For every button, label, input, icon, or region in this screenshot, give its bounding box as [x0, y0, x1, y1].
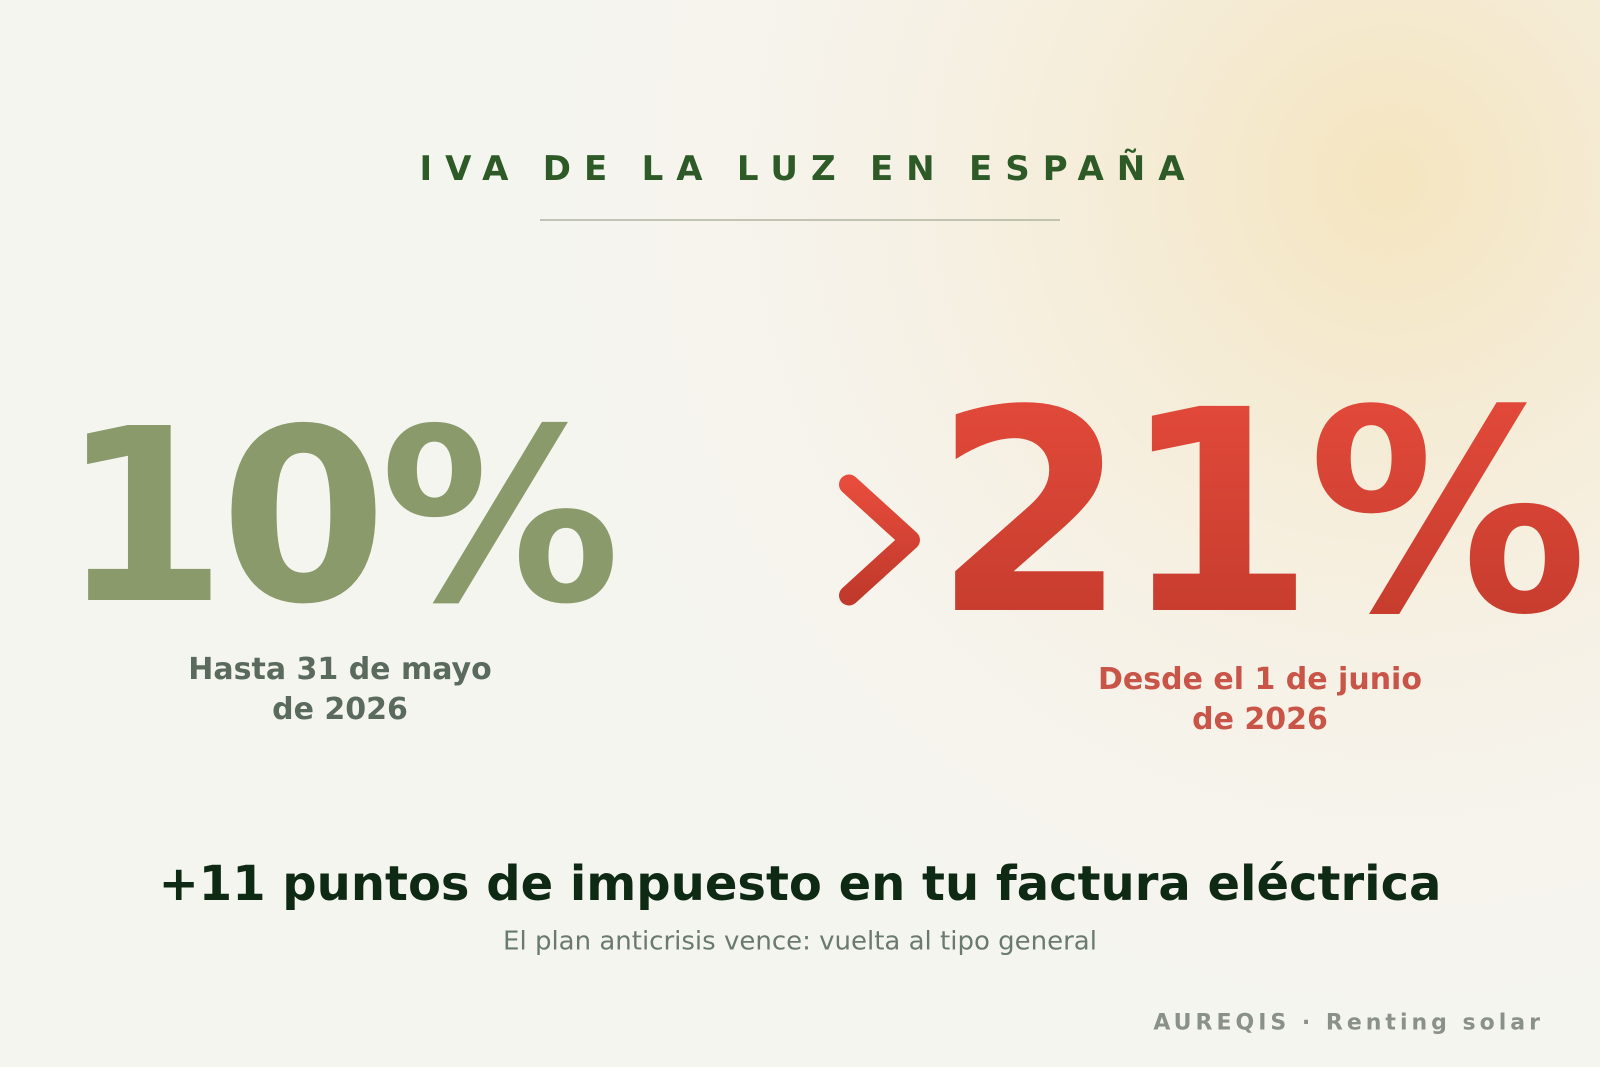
headline: +11 puntos de impuesto en tu factura eléctrica	[159, 856, 1441, 912]
old rate: 10%: 10%	[60, 377, 613, 657]
new rate date label: Desde el 1 de junio	[1098, 662, 1422, 697]
icon: chevron arrow	[849, 484, 910, 596]
new rate: 21%: 21%	[933, 351, 1583, 677]
subheadline: El plan anticrisis vence: vuelta al tipo general	[503, 926, 1097, 956]
old rate date label: Hasta 31 de mayo	[188, 652, 492, 687]
title: IVA DE LA LUZ EN ESPAÑA	[420, 148, 1198, 189]
footer brand: AUREQIS · Renting solar	[1153, 1010, 1544, 1036]
old rate date label: de 2026	[272, 692, 408, 727]
new rate date label: de 2026	[1192, 702, 1328, 737]
